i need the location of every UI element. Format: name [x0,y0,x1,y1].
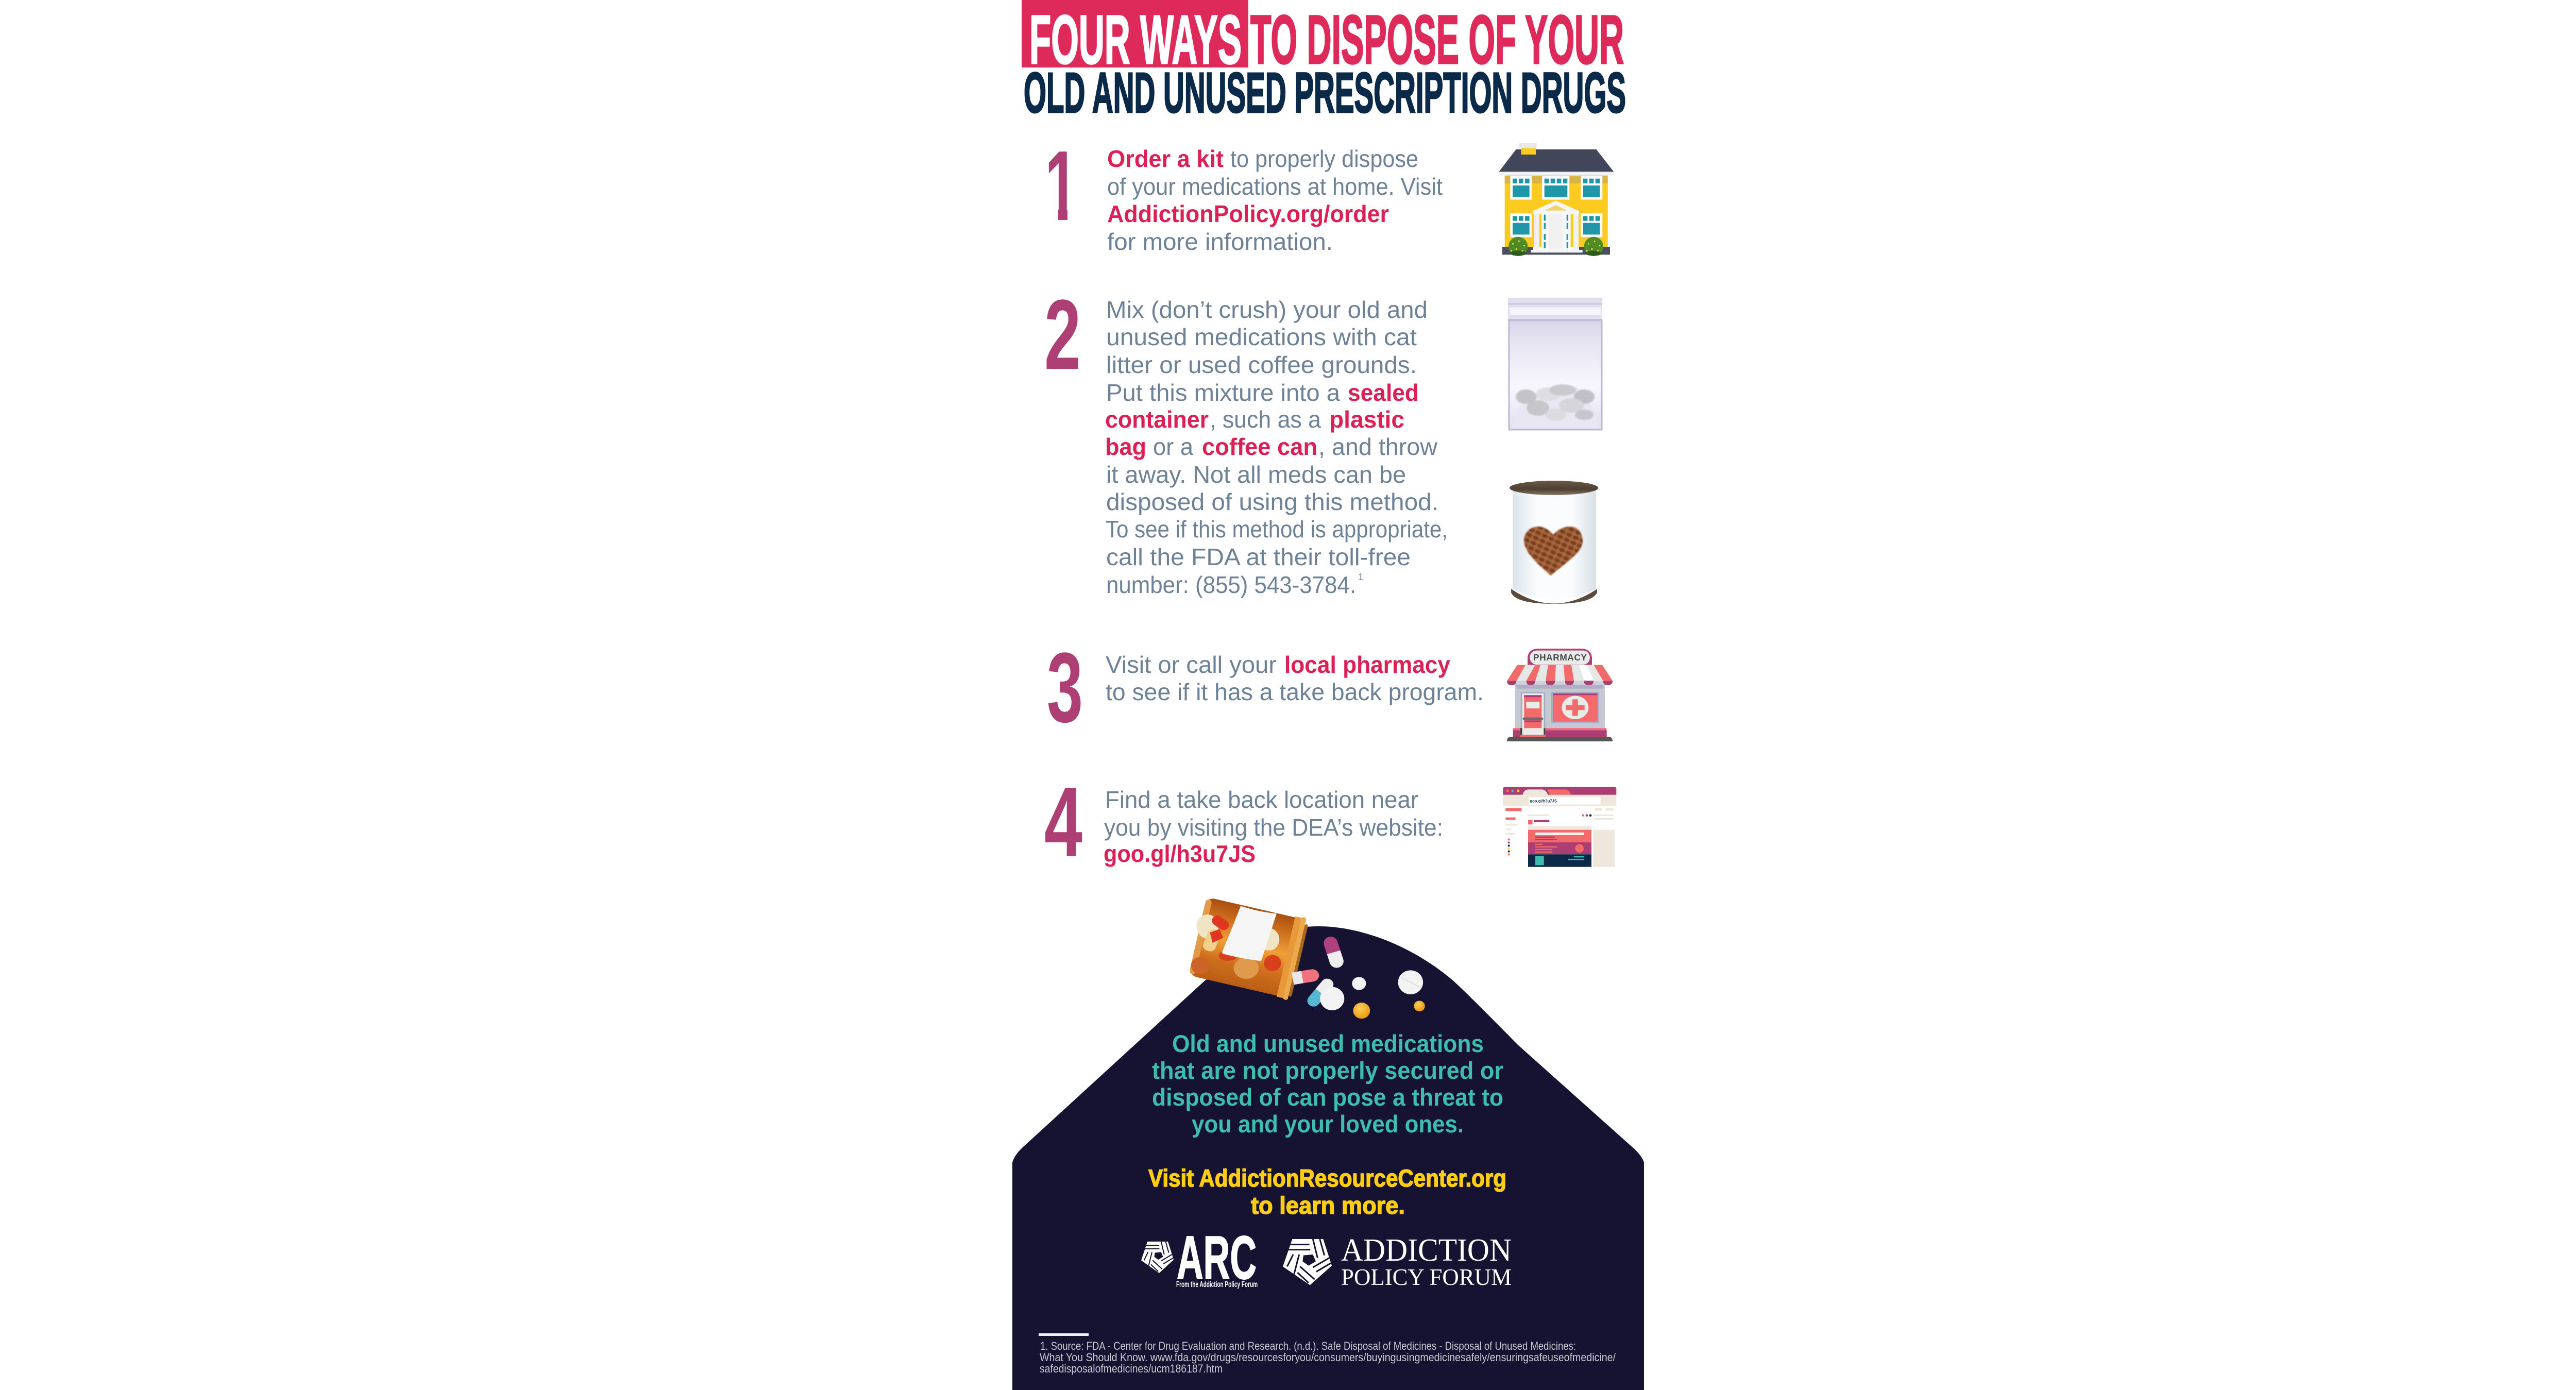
step 2 text: or a [1153,433,1193,460]
call to action: to learn more. [1251,1192,1405,1219]
footnote: What You Should Know. www.fda.gov/drugs/resourcesforyou/consumers/buyingusingmedicinesafely/ensuringsafeuseofmedicine/ [1040,1351,1616,1364]
white tablet [1320,987,1344,1010]
panel: dark bottom panel [1012,895,1644,1390]
step 2 text: , and throw [1318,433,1438,460]
footnote [1040,1340,1616,1375]
coffee bean heart [1524,527,1583,575]
icon: coffee can [1510,481,1598,604]
step number 1: 1 [1045,130,1078,241]
step 2 text: sealed [1348,379,1419,406]
ARC shield [1141,1242,1174,1273]
ARC tagline: From the Addiction Policy Forum [1176,1280,1258,1289]
title [1022,0,1626,125]
icon: pharmacy: PHARMACY [1533,652,1587,663]
step 2 text: unused medications with cat [1106,324,1417,350]
step 2 text: it away. Not all meds can be [1106,461,1406,488]
step 3 text: local pharmacy [1284,651,1450,678]
step 3 text [1106,651,1484,705]
step 2 text: To see if this method is appropriate, [1106,516,1448,543]
call to action [1148,1164,1506,1219]
step 4 text: goo.gl/h3u7JS [1104,840,1256,867]
step 2 text: 1 [1358,572,1363,582]
text: TO DISPOSE OF YOUR [1250,2,1624,78]
orange bead [1353,1003,1370,1019]
step 2 text: number: (855) 543-3784. [1106,571,1356,598]
step 3 text: Visit or call your [1106,651,1277,678]
ARC wordmark: ARC [1177,1224,1257,1292]
step 1 text: AddictionPolicy.org/order [1107,200,1389,227]
step 2 text: coffee can [1202,433,1317,460]
step 2 text: disposed of using this method. [1106,488,1438,515]
icon: plastic bag [1508,298,1602,430]
footnote: 1. Source: FDA - Center for Drug Evaluation and Research. (n.d.). Safe Disposal of Medicines - Disposal of Unused Medicines: [1040,1340,1576,1352]
icon: house [1498,143,1614,256]
icon: pharmacy [1507,649,1613,741]
step 2 text: litter or used coffee grounds. [1106,351,1417,378]
step 2 text: Put this mixture into a [1106,379,1340,406]
panel background [1012,926,1644,1390]
step number 2: 2 [1044,279,1081,390]
icon: browser window: goo.gl/h3u7JS [1530,799,1557,803]
step 1 [1049,143,1614,256]
APF wordmark line 1: ADDICTION [1341,1233,1512,1268]
step 4 [1044,766,1616,877]
APF wordmark line 2: POLICY FORUM [1341,1264,1512,1290]
pink capsule [1292,968,1320,985]
warning message: you and your loved ones. [1192,1110,1464,1138]
bottle body [1188,895,1310,1001]
small orange bead [1414,1001,1425,1011]
step 2 text: , such as a [1210,406,1321,433]
logo: ARC [1141,1224,1258,1292]
step 1 text: for more information. [1107,228,1333,255]
small white tablet [1352,977,1366,990]
step 2 text: bag [1105,433,1146,460]
warning message: disposed of can pose a threat to [1152,1083,1503,1111]
step 3 text: to see if it has a take back program. [1106,679,1484,705]
step 1 text: Order a kit [1107,145,1224,172]
blue capsule [1305,976,1336,1009]
big white tablet [1398,970,1423,994]
title: second line: OLD AND UNUSED PRESCRIPTION DRUGS [1024,61,1626,125]
step 2 [1044,279,1602,604]
title: four ways: FOUR WAYS [1029,2,1242,78]
step 3 [1047,632,1613,743]
logo: Addiction Policy Forum [1283,1233,1512,1290]
step 4 text: Find a take back location near [1105,786,1418,813]
icon: pill bottle [1188,895,1310,1001]
warning message [1152,1030,1503,1138]
step 2 text: plastic [1329,406,1404,433]
step 4 text [1104,786,1443,867]
step 1 text [1107,145,1443,255]
call to action: Visit AddictionResourceCenter.org [1148,1164,1506,1192]
step number 4: 4 [1044,766,1082,877]
step 1 text: to properly dispose [1230,145,1418,172]
step 2 text: call the FDA at their toll-free [1106,544,1411,570]
footnote rule [1039,1333,1089,1336]
step 2 text: Mix (don’t crush) your old and [1106,296,1428,323]
warning message: Old and unused medications [1172,1030,1484,1057]
pills spilling from bottle [1292,935,1425,1019]
title highlight box [1022,0,1248,67]
step number 3: 3 [1047,632,1083,743]
footnote: safedisposalofmedicines/ucm186187.htm [1040,1362,1223,1375]
icon: browser window [1503,787,1616,867]
magenta capsule [1322,935,1345,970]
APF shield [1283,1239,1332,1285]
step 2 text [1105,296,1448,598]
bottle label [1222,906,1277,961]
pills inside bottle [1191,906,1281,979]
step 1 text: of your medications at home. Visit [1107,173,1443,200]
warning message: that are not properly secured or [1152,1057,1503,1084]
step 4 text: you by visiting the DEA’s website: [1104,814,1443,841]
step 2 text: container [1105,406,1209,433]
